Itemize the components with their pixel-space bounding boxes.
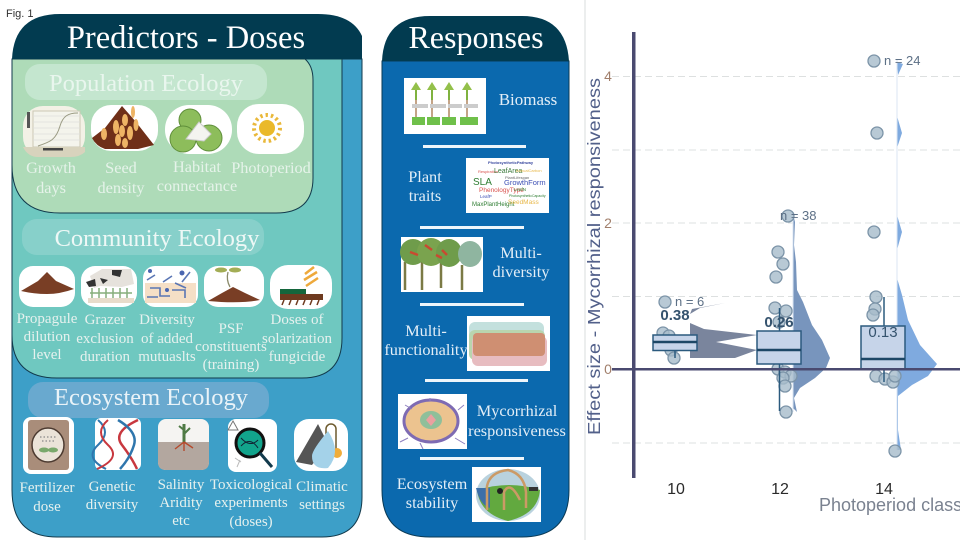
- x-axis tick labels: 10: [667, 481, 685, 498]
- population pill: Population Ecology: [49, 70, 244, 97]
- icon: PSF constituents: [204, 266, 264, 307]
- text: ecosystem labels: Climatic: [296, 479, 348, 495]
- title: Predictors - Doses: [67, 20, 305, 56]
- icon: growth days: [23, 106, 85, 157]
- figure label: Fig. 1: [6, 8, 34, 20]
- text: population labels: days: [36, 178, 66, 197]
- text: ecosystem labels: dose: [33, 499, 61, 515]
- y-axis tick labels: 4: [604, 68, 612, 84]
- text: ecosystem labels: (doses): [229, 514, 273, 530]
- violin: class 12: [793, 214, 830, 412]
- text: community labels: Diversity: [139, 312, 195, 328]
- text: ecosystem labels: etc: [172, 513, 190, 529]
- image: multi-diversity trees: [400, 237, 483, 292]
- image: plant traits word cloud: SLA: [473, 177, 492, 188]
- text: population labels: density: [97, 178, 145, 197]
- image: plant traits word cloud: LeafArea: [494, 168, 523, 175]
- panel: ecosystem background: [12, 59, 362, 537]
- image: plant traits word cloud: Respiration: [478, 169, 498, 174]
- icon: diversity of added mutualists: [143, 266, 198, 307]
- icon: seed density: [91, 105, 158, 151]
- text: community labels: level: [32, 347, 62, 363]
- boxplot: class 10: [653, 335, 697, 358]
- image: plant traits word cloud: LeafN: [514, 187, 526, 192]
- label: mycorrhizal responsiveness: responsiveness: [468, 421, 566, 440]
- image: plant traits word cloud: PhotosyntheticCapacity: [509, 194, 546, 198]
- panel: community background: [12, 59, 342, 378]
- community pill: Community Ecology: [55, 225, 260, 252]
- boxplot: class 14: [861, 297, 905, 382]
- text: community labels: solarization: [262, 331, 332, 347]
- panel: predictors: [12, 14, 362, 537]
- grid lines: [612, 76, 960, 443]
- text: population labels: Photoperiod: [231, 158, 311, 177]
- panel: responses: [382, 16, 569, 537]
- icon: climatic settings: [294, 419, 348, 471]
- panel: population background: [12, 59, 313, 213]
- x-axis tick labels: 12: [771, 481, 789, 498]
- text: community labels: dilution: [24, 329, 71, 345]
- icon: habitat connectance: [165, 105, 232, 154]
- mean value labels: 0.26: [764, 314, 794, 331]
- text: ecosystem labels: diversity: [86, 497, 139, 513]
- responses header: [382, 16, 569, 61]
- image: plant traits word cloud: GrowthForm: [504, 178, 546, 187]
- chart: raincloud plot: [584, 32, 960, 515]
- mean value labels: 0.13: [868, 324, 898, 341]
- x-axis title: Photoperiod class: [819, 495, 960, 515]
- text: ecosystem labels: [20, 477, 348, 530]
- label: mycorrhizal responsiveness: [468, 401, 566, 440]
- text: community labels: fungicide: [269, 349, 326, 365]
- image: plant traits word cloud: SeedMass: [508, 199, 539, 206]
- label: multi-functionality: functionality: [384, 340, 468, 359]
- community pill: [22, 219, 264, 255]
- separator: [425, 379, 528, 382]
- mean value labels: 0.38: [660, 307, 690, 324]
- text: ecosystem labels: Salinity: [158, 477, 205, 493]
- mean value labels: [660, 307, 898, 341]
- points: class 14: [867, 55, 901, 457]
- sample size labels: n = 24: [884, 53, 921, 68]
- label: ecosystem stability: stability: [406, 493, 459, 512]
- text: population labels: connectance: [157, 176, 237, 195]
- separator: [420, 457, 524, 460]
- image: multi-functionality: [467, 316, 550, 371]
- header band: [12, 14, 362, 59]
- x-axis tick labels: 14: [875, 481, 893, 498]
- image: biomass: [404, 78, 486, 134]
- icon: fertilizer: [23, 417, 74, 474]
- label: multi-diversity: diversity: [493, 262, 550, 281]
- text: community labels: Propagule: [17, 311, 78, 327]
- text: population labels: Seed: [105, 158, 137, 177]
- text: community labels: [17, 311, 332, 373]
- violin: class 14: [897, 62, 937, 450]
- points: class 12: [769, 210, 797, 418]
- text: community labels: of added: [141, 331, 194, 347]
- label: plant traits: [408, 167, 442, 205]
- x-axis tick labels: [667, 481, 893, 498]
- text: community labels: PSF: [218, 321, 244, 337]
- icon: photoperiod: [237, 104, 304, 154]
- icon: salinity aridity: [158, 419, 209, 470]
- responses title: Responses: [408, 19, 544, 55]
- label: ecosystem stability: Ecosystem: [397, 474, 468, 493]
- label: plant traits: traits: [409, 186, 441, 205]
- text: population labels: Habitat: [173, 157, 221, 176]
- text: community labels: duration: [80, 349, 130, 365]
- boxplot: class 12: [757, 308, 801, 411]
- separator: [420, 303, 524, 306]
- text: community labels: exclusion: [76, 331, 134, 347]
- icon: grazer exclusion: [81, 266, 137, 307]
- label: multi-functionality: Multi-: [405, 321, 447, 340]
- label: multi-diversity: Multi-: [500, 243, 542, 262]
- text: ecosystem labels: Toxicological: [210, 477, 292, 493]
- icon: genetic diversity: [93, 418, 141, 470]
- population pill: [25, 64, 267, 100]
- text: community labels: (training): [203, 357, 259, 373]
- label: multi-functionality: [384, 321, 468, 359]
- y-axis tick labels: 0: [604, 361, 612, 377]
- image: plant traits word cloud: PhotosyntheticPathway: [488, 160, 534, 165]
- violin center lines: [793, 60, 897, 450]
- separator: [423, 145, 526, 148]
- icon: solarization: [270, 265, 332, 309]
- label: biomass: Biomass: [499, 90, 557, 109]
- label: mycorrhizal responsiveness: Mycorrhizal: [477, 401, 558, 420]
- icon: propagule dilution: [19, 266, 75, 307]
- points: class 10: [657, 296, 680, 364]
- text: population labels: [26, 157, 311, 197]
- axes: [612, 32, 960, 478]
- image: plant traits word cloud: PlantLifespan: [505, 175, 529, 180]
- text: ecosystem labels: Fertilizer: [20, 480, 74, 496]
- image: plant traits word cloud: AnnualCarbon: [516, 168, 542, 173]
- text: ecosystem labels: Aridity: [159, 495, 203, 511]
- label: plant traits: Plant: [408, 167, 442, 186]
- label: ecosystem stability: [397, 474, 468, 512]
- image: plant traits word cloud: LeafP: [480, 194, 492, 199]
- text: community labels: Doses of: [271, 312, 323, 328]
- icon: toxicological: [228, 419, 277, 472]
- y-axis tick labels: [604, 68, 612, 377]
- image: mycorrhizal root: [398, 394, 467, 449]
- y-axis tick labels: 2: [604, 215, 612, 231]
- image: ecosystem stability: [472, 467, 541, 522]
- text: community labels: Grazer: [85, 312, 125, 328]
- label: multi-diversity: [493, 243, 550, 281]
- separator: [420, 226, 524, 229]
- text: ecosystem labels: settings: [299, 497, 345, 513]
- image: plant traits word cloud: MaxPlantHeight: [472, 202, 515, 208]
- text: community labels: constituents: [195, 339, 267, 355]
- text: ecosystem labels: Genetic: [89, 479, 136, 495]
- text: ecosystem labels: experiments: [214, 495, 288, 511]
- image: plant traits word cloud: [466, 158, 549, 213]
- ecosystem pill: Ecosystem Ecology: [54, 384, 249, 411]
- ecosystem pill: [28, 382, 269, 418]
- responses background: [382, 61, 569, 537]
- sample size labels: n = 6: [675, 294, 704, 309]
- text: population labels: Growth: [26, 158, 76, 177]
- image: plant traits word cloud: PhenologyType: [479, 187, 524, 194]
- sample size labels: [675, 53, 921, 309]
- text: community labels: mutuaslts: [138, 349, 196, 365]
- violin: class 10: [690, 303, 757, 358]
- y-axis title: Effect size - Mycorrhizal responsiveness: [584, 78, 604, 435]
- panel divider: [584, 0, 586, 540]
- sample size labels: n = 38: [780, 208, 817, 223]
